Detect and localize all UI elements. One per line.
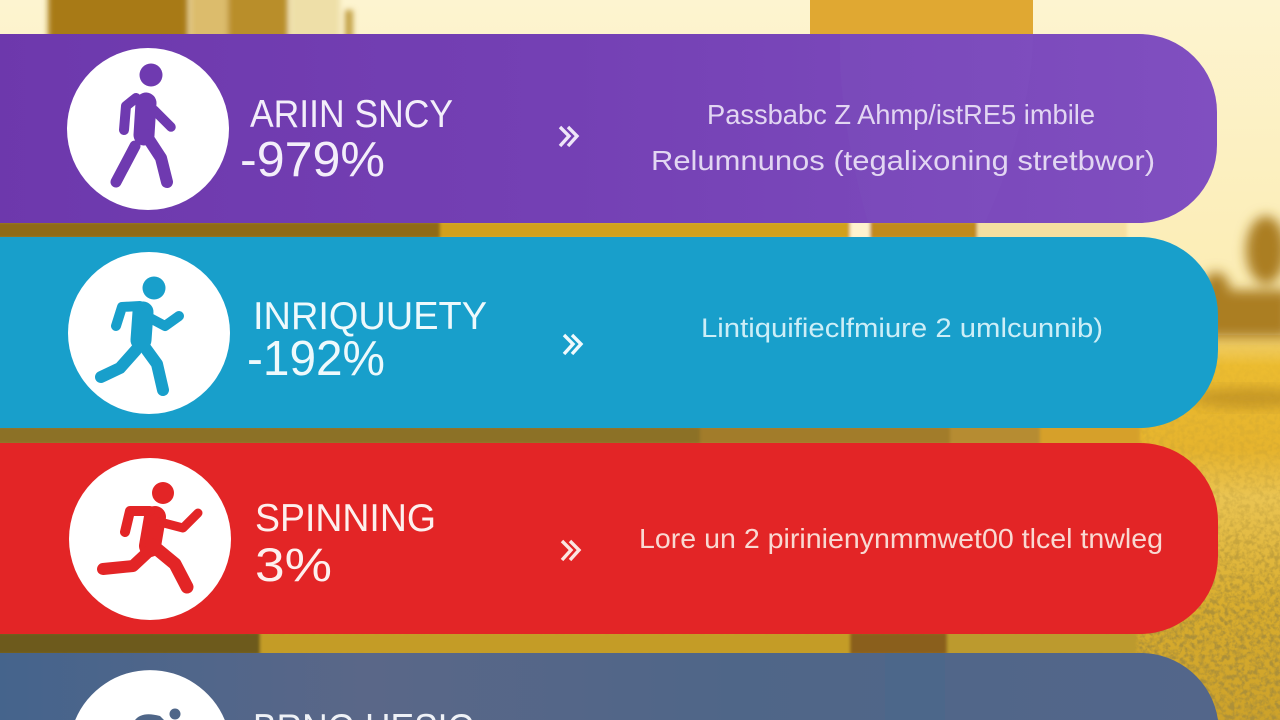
stat: purple: -979% xyxy=(240,133,385,187)
heading: blue: INRIQUUETY xyxy=(253,295,487,338)
arrow: purple xyxy=(560,127,577,146)
panel: red running band xyxy=(0,443,1218,634)
runner silhouette through band xyxy=(840,34,1033,223)
background: distant trees left xyxy=(48,0,353,50)
icon: jogging figure xyxy=(68,252,230,414)
background: dark band in field xyxy=(1190,388,1280,408)
panel: slate band xyxy=(0,653,1218,720)
icon: running figure xyxy=(69,458,231,620)
stat: red: 3% xyxy=(255,538,332,591)
text block: purple xyxy=(651,99,1155,176)
runner leg through band xyxy=(885,653,945,720)
stat: blue: -192% xyxy=(247,332,385,386)
panel: purple walking band xyxy=(0,34,1217,223)
background: distant trees right xyxy=(1202,216,1280,338)
background: runner shirt xyxy=(810,0,1033,35)
arrow: blue xyxy=(564,335,581,354)
background: strip colours between bars xyxy=(0,221,1140,655)
text block: purple: Relumnunos (tegalixoning stretbwor) xyxy=(651,145,1155,176)
text block: red: Lore un 2 pirinienynmmwet00 tlcel tnwleg xyxy=(639,523,1163,554)
icon: walking figure xyxy=(67,48,229,210)
heading: red: SPINNING xyxy=(255,497,436,540)
icon: sprinting figure xyxy=(75,670,225,720)
heading: purple: ARIIN SNCY xyxy=(250,93,453,136)
text block: purple: Passbabc Z Ahmp/istRE5 imbile xyxy=(707,99,1095,130)
arrow: red xyxy=(562,541,579,560)
text block: blue: Lintiquifieclfmiure 2 umlcunnib) xyxy=(701,313,1103,343)
panel: blue jogging band xyxy=(0,237,1218,428)
